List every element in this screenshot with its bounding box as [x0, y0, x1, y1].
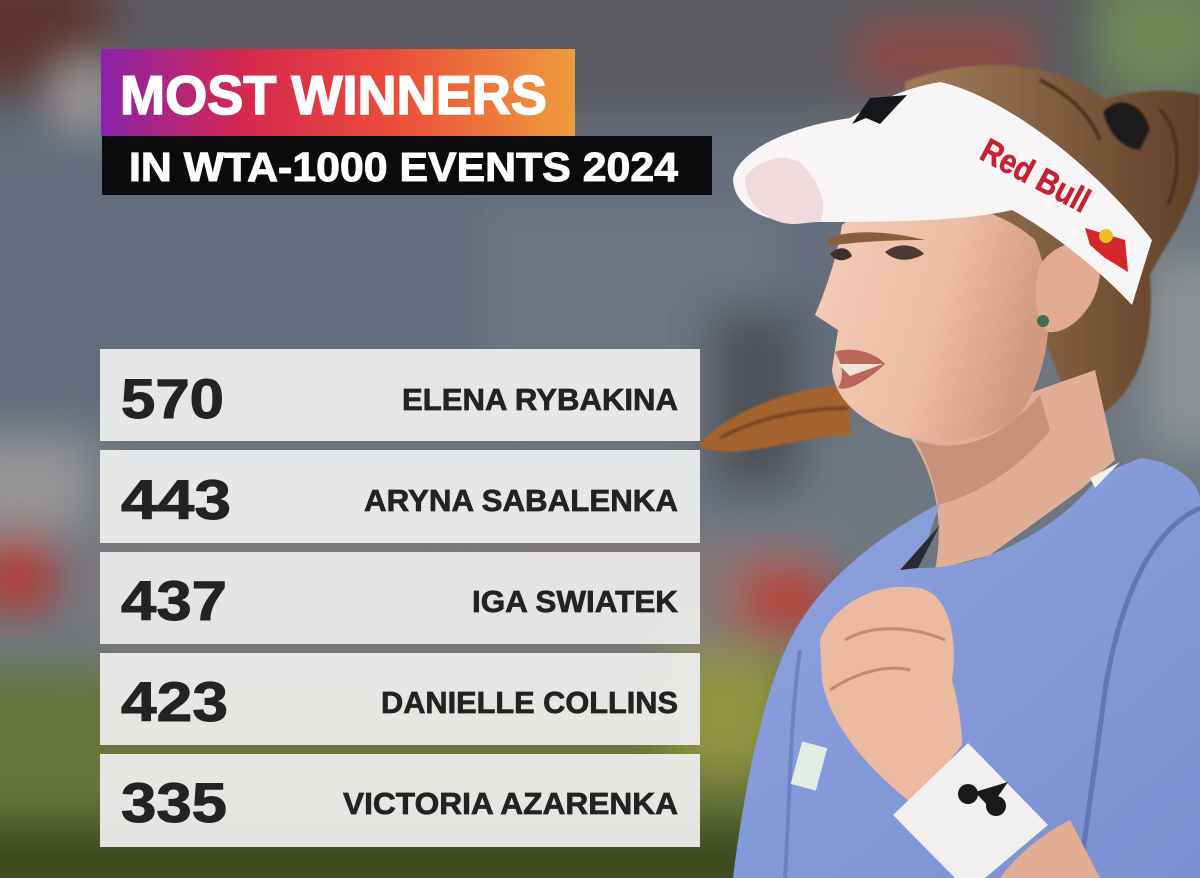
sponsor bulls	[1085, 228, 1128, 272]
row: Victoria Azarenka: 335	[121, 771, 227, 834]
row: Victoria Azarenka: VICTORIA AZARENKA	[343, 786, 678, 821]
visor logo	[852, 95, 907, 124]
subtitle banner	[102, 136, 712, 195]
visor	[733, 82, 1152, 305]
lips	[835, 350, 885, 389]
row: Elena Rybakina: 570	[121, 367, 224, 430]
title banner	[101, 49, 575, 136]
subtitle text: IN WTA-1000 EVENTS 2024	[129, 144, 678, 190]
ear	[1036, 243, 1100, 332]
leaderboard	[100, 349, 700, 847]
wristband logo	[958, 782, 1008, 816]
row: Danielle Collins: 423	[121, 670, 228, 733]
hair	[905, 65, 1200, 412]
sponsor text: Red Bull	[974, 132, 1096, 220]
row: Iga Swiatek: IGA SWIATEK	[472, 584, 679, 619]
row: Iga Swiatek: 437	[121, 569, 227, 632]
arm and fist	[1000, 820, 1100, 878]
row: Aryna Sabalenka: 443	[121, 468, 231, 531]
shirt	[733, 458, 1200, 878]
row: Elena Rybakina	[100, 349, 700, 441]
row: Danielle Collins: DANIELLE COLLINS	[381, 685, 678, 720]
row: Iga Swiatek	[100, 552, 700, 644]
logo patch	[791, 741, 827, 791]
row: Elena Rybakina: ELENA RYBAKINA	[402, 382, 678, 417]
face	[815, 202, 1049, 441]
row: Aryna Sabalenka	[100, 450, 700, 543]
row: Aryna Sabalenka: ARYNA SABALENKA	[364, 483, 678, 518]
eye and brow	[828, 232, 925, 246]
title text: MOST WINNERS	[120, 64, 547, 126]
row: Victoria Azarenka	[100, 754, 700, 847]
wristband	[893, 743, 1048, 878]
neck and chest	[905, 370, 1115, 570]
row: Danielle Collins	[100, 653, 700, 745]
ponytail flying	[697, 384, 850, 451]
player photo illustration	[697, 65, 1200, 878]
